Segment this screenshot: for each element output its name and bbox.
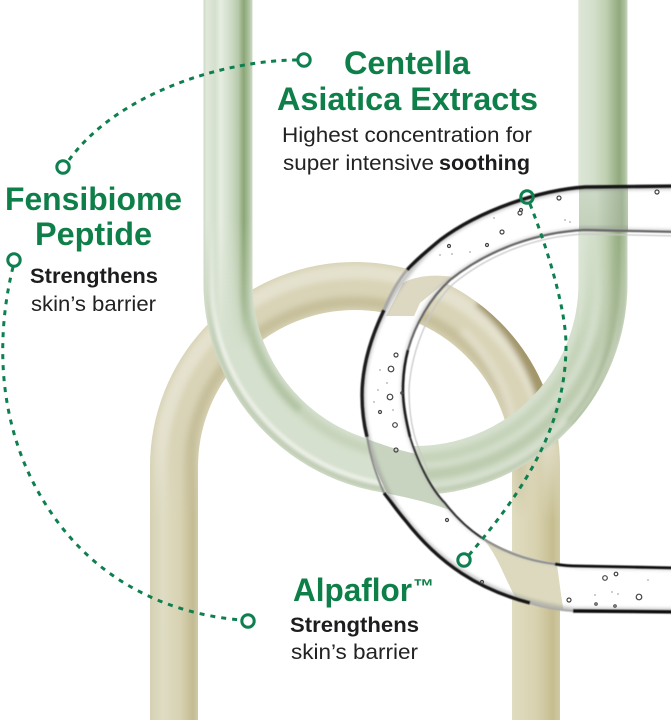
dashed leader: glass tube	[469, 204, 566, 555]
text: Alpaflor description: Strengthens	[290, 612, 419, 637]
dashed leader: Fensibiome to Alpaflor	[3, 267, 241, 620]
glass tube	[355, 186, 671, 612]
beige tube	[148, 272, 560, 720]
text: Fensibiome description: skin’s barrier	[31, 291, 156, 316]
text: Centella description: super intensive	[283, 150, 434, 175]
heading: Alpaflor: Alpaflor	[293, 572, 412, 608]
marker: Fensibiome upper	[57, 161, 69, 173]
green tube	[203, 0, 628, 492]
heading: Fensibiome Peptide	[5, 181, 182, 252]
bubbles	[378, 190, 659, 607]
marker: Alpaflor left	[242, 615, 254, 627]
tiny bubble dots	[373, 217, 649, 596]
heading: Centella Asiatica Extracts: Centella	[344, 45, 470, 81]
text: Fensibiome description	[30, 263, 158, 316]
heading: Centella Asiatica Extracts: Asiatica Extracts	[277, 81, 538, 117]
text: Alpaflor description	[290, 612, 419, 664]
heading: Alpaflor: ™	[413, 576, 434, 598]
dashed leader: Centella to Fensibiome	[69, 60, 297, 160]
marker: glass bottom	[458, 554, 470, 566]
heading: Centella Asiatica Extracts	[277, 45, 538, 117]
marker: glass top	[521, 191, 533, 203]
text: Centella description: Highest concentration for	[282, 122, 532, 147]
soft inner shading	[362, 186, 671, 612]
glass edges	[362, 186, 671, 612]
refracted tube patches	[355, 186, 671, 612]
heading: Fensibiome Peptide: Fensibiome	[5, 181, 182, 217]
marker: Centella	[298, 54, 310, 66]
heading: Fensibiome Peptide: Peptide	[35, 216, 152, 252]
glass body	[362, 186, 671, 612]
marker: Fensibiome lower	[8, 254, 20, 266]
text: Centella description: soothing	[439, 150, 530, 175]
text: Alpaflor description: skin’s barrier	[291, 639, 418, 664]
text: Centella description	[282, 122, 532, 175]
text: Fensibiome description: Strengthens	[30, 263, 158, 288]
